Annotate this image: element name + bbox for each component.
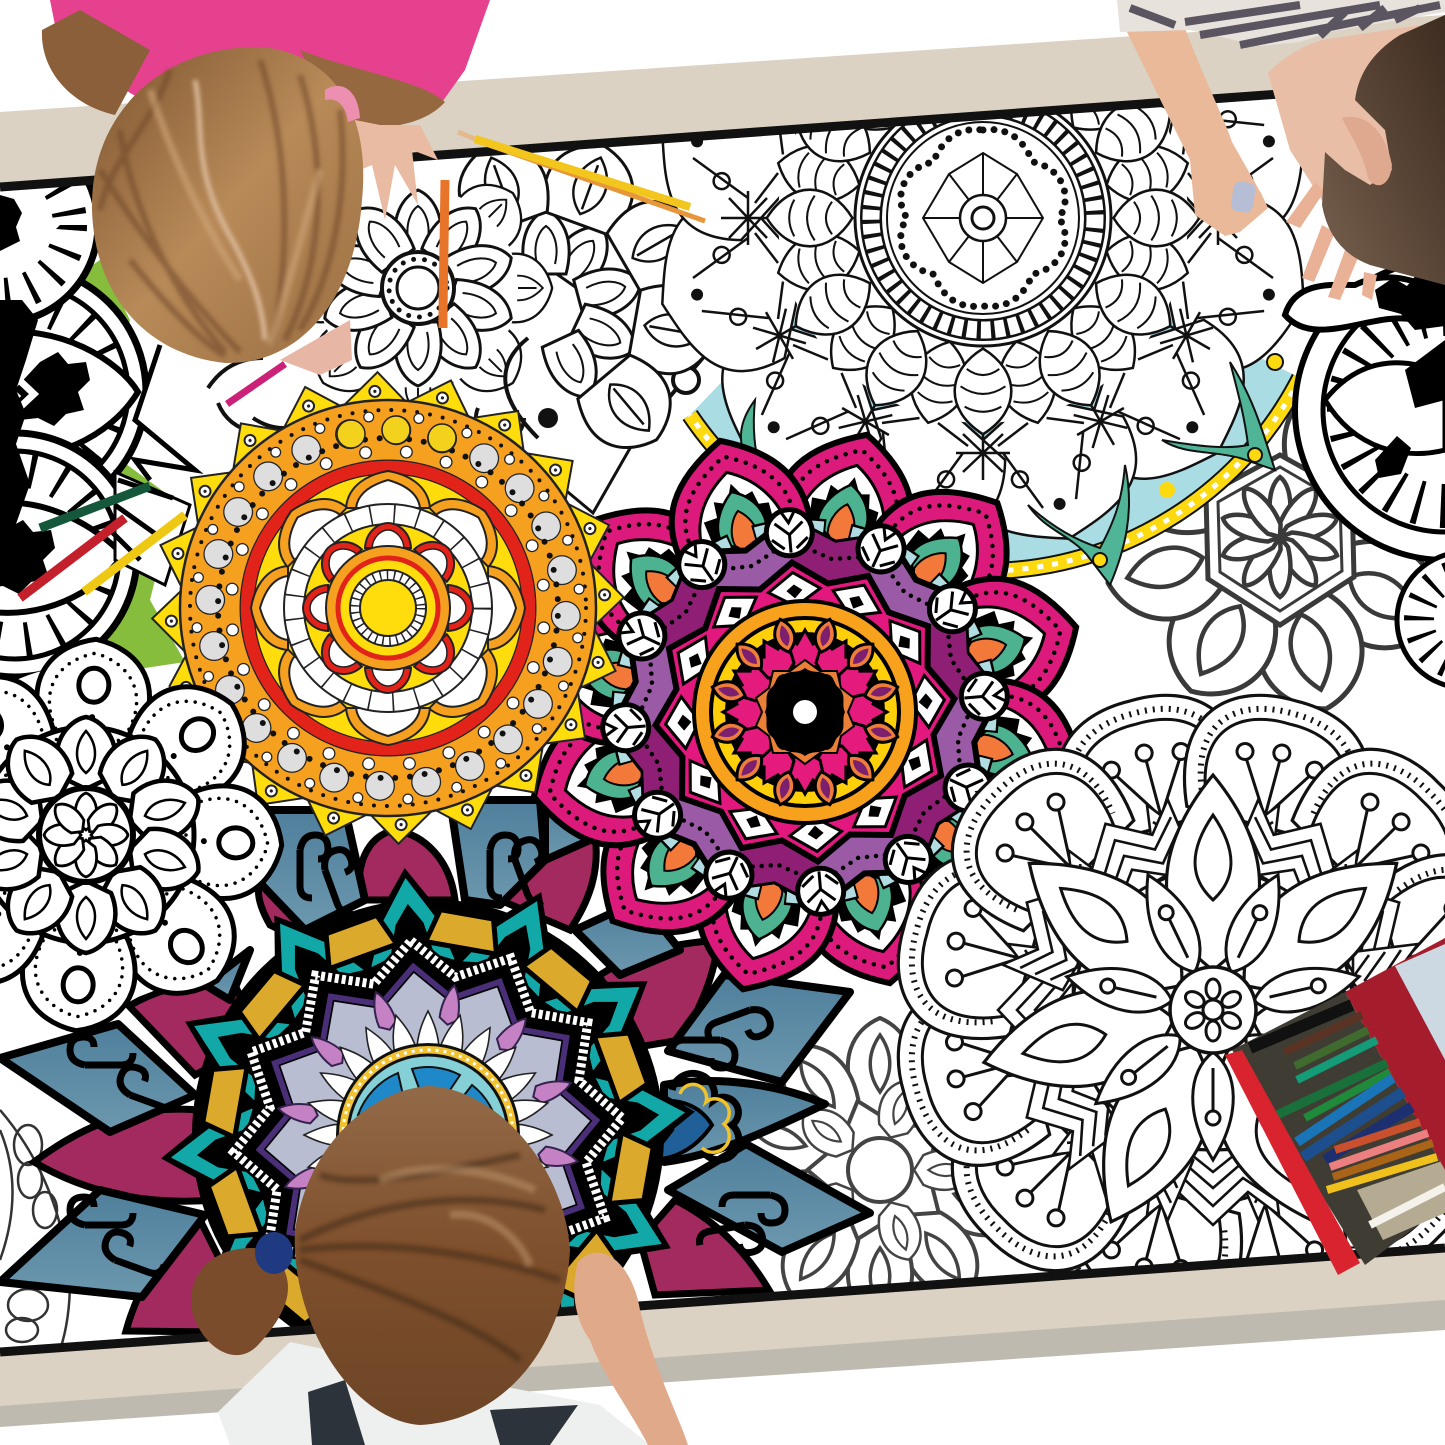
box interior	[1232, 992, 1445, 1265]
black backing	[192, 899, 664, 1371]
maroon petals	[34, 830, 769, 1332]
upper eye motif	[16, 280, 148, 478]
black central column	[0, 300, 38, 554]
blue hair tie	[255, 1232, 293, 1274]
hair strands	[100, 60, 343, 356]
connector lines	[135, 345, 195, 480]
inner pink star	[652, 558, 958, 866]
light blue background segment	[690, 318, 1300, 571]
ponytail	[191, 1248, 288, 1355]
box lid	[1345, 938, 1445, 1170]
green colored patches at left	[85, 260, 183, 668]
dark hair	[1322, 15, 1445, 285]
hands	[355, 120, 438, 220]
denim overalls	[308, 1380, 578, 1445]
lower left line pattern	[0, 1110, 70, 1350]
head of hair	[92, 47, 363, 363]
blue leaves	[0, 800, 870, 1297]
ear	[1342, 117, 1392, 185]
top eye motif	[0, 184, 98, 320]
red pencil	[20, 518, 125, 598]
poster top black rail	[0, 82, 1445, 187]
box red front edge	[1225, 1050, 1360, 1275]
poster bottom black rail	[0, 1248, 1445, 1352]
bottom right line mandala	[896, 694, 1445, 1272]
hair parting	[195, 80, 265, 340]
yellow mandala top tinted dots	[337, 416, 456, 452]
rear dark hair	[42, 10, 150, 115]
green leaf trims and yellow balls	[741, 354, 1283, 585]
child bottom	[191, 1086, 688, 1445]
child top left	[42, 0, 490, 375]
blue leaf swirls	[70, 835, 785, 1276]
light blue swoops	[603, 510, 1007, 914]
pink hair tie	[325, 86, 360, 122]
left dark mandala	[0, 127, 195, 677]
green pencil	[40, 486, 150, 528]
navy and yellow motif	[663, 1099, 714, 1158]
pink shirt	[50, 0, 490, 125]
black knot motif	[1375, 276, 1444, 330]
left line mandala	[0, 636, 285, 1034]
top centre line flower	[206, 147, 704, 516]
table front edge	[0, 1300, 1445, 1427]
pencils in box	[1250, 1005, 1445, 1225]
arm and hand	[574, 1253, 688, 1445]
fingers	[1286, 182, 1377, 300]
right side grey mandala	[1106, 410, 1424, 711]
white floral shirt	[218, 1342, 650, 1445]
striped shirt	[1117, 0, 1445, 46]
lower grey line mandala	[758, 1016, 986, 1291]
yellow beaded band	[690, 378, 1300, 571]
child top right	[1117, 0, 1445, 300]
blue and teal coloured mandala	[0, 796, 874, 1335]
top pencils	[475, 140, 705, 221]
small pink pencil	[227, 364, 285, 404]
vertical orange pencil	[443, 180, 445, 328]
colour pencil box	[1225, 938, 1445, 1275]
top line mandala	[640, 0, 1326, 571]
loose pencils	[20, 132, 705, 598]
purple band	[621, 528, 989, 896]
lower eye motif	[0, 433, 137, 677]
yellow pencil	[84, 515, 185, 592]
yellow and orange coloured mandala	[150, 370, 625, 846]
face and neck	[1268, 25, 1420, 205]
pink magenta coloured mandala	[531, 432, 1080, 992]
arm and hand with marker	[1125, 20, 1268, 236]
far right line mandala	[1285, 260, 1445, 688]
hair strands	[300, 1155, 560, 1360]
head of hair	[295, 1086, 570, 1425]
